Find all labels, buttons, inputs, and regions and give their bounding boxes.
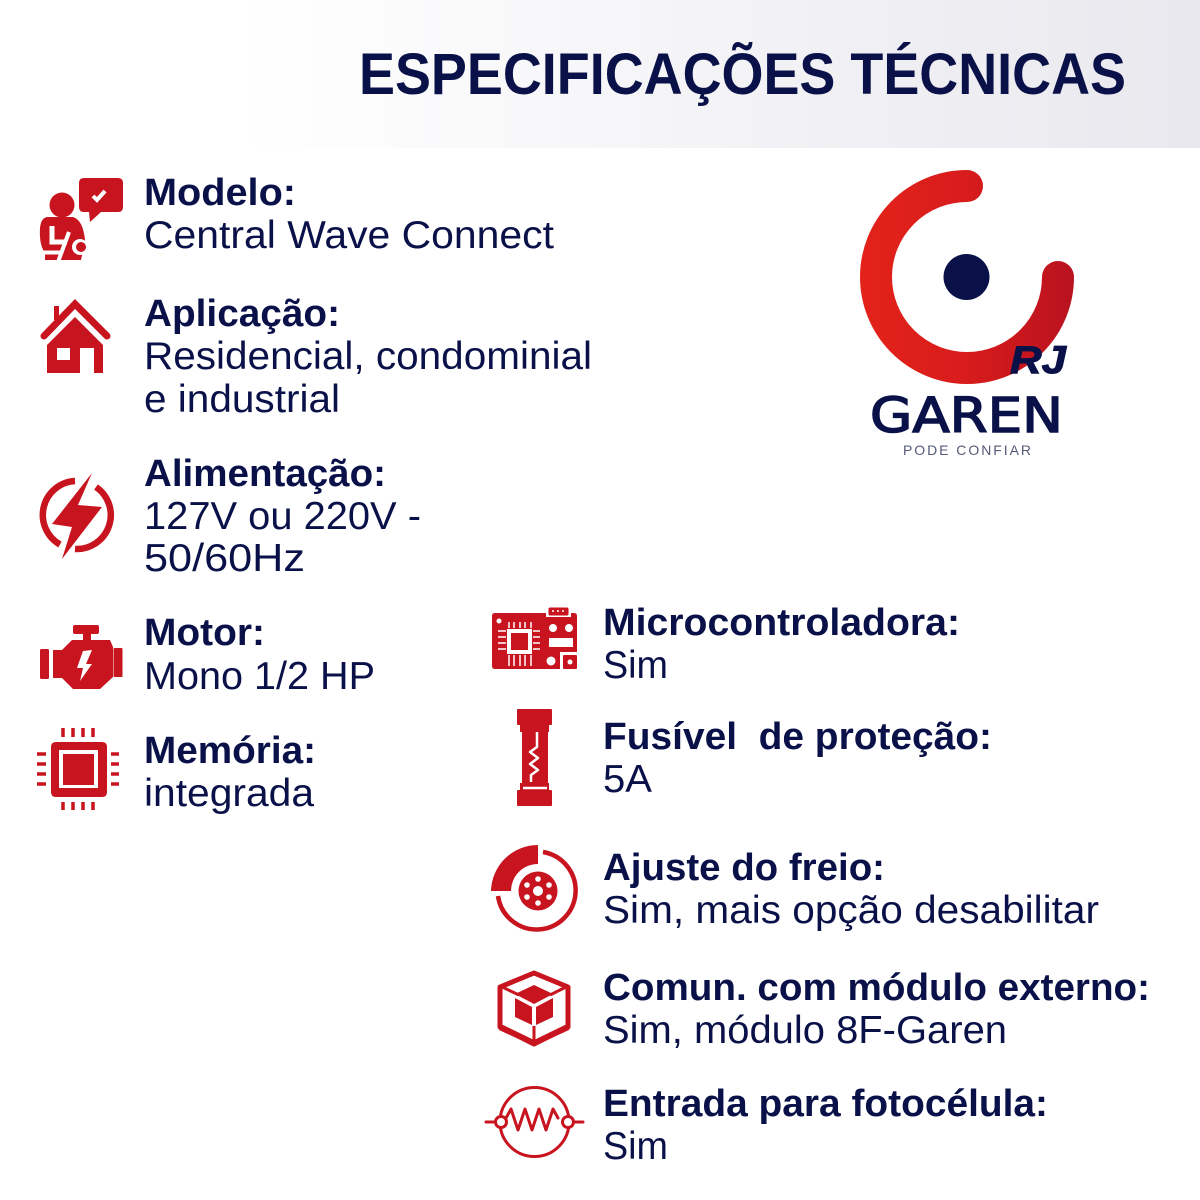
text: motor [144,612,375,698]
logo wordmark: GAREN [870,388,1063,444]
text: memoria: integrada [144,772,314,815]
icon: photocell [486,1088,583,1156]
text: aplicacao: Aplicação: [144,293,340,335]
text: memoria: Memória: [144,730,316,772]
text: comunicacao: Comun. com módulo externo: [603,967,1150,1009]
text: ajuste do freio: Sim, mais opção desabilitar [603,889,1099,932]
text: alimentacao [144,453,421,580]
text: fusivel: 5A [603,758,652,801]
icon: circuit board [492,607,577,669]
logo: Garen RJ [870,186,1067,458]
text: aplicacao [144,293,592,421]
header band [0,0,1200,148]
text: motor: Mono 1/2 HP [144,655,375,698]
text: microcontroladora: Microcontroladora: [603,602,960,644]
icon: engine [40,625,122,689]
text: fusivel: Fusível de proteção: [603,716,992,758]
title: ESPECIFICAÇÕES TÉCNICAS [359,42,1126,107]
icon: fuse [517,709,552,806]
logo dot [944,254,990,300]
icon: house [44,304,107,373]
text: fusivel [603,716,992,801]
icon: cube module [499,973,569,1046]
text: fotocelula: Entrada para fotocélula: [603,1083,1048,1125]
text: comunicacao [603,967,1150,1052]
text: alimentacao: 50/60Hz [144,537,305,580]
text: motor: Motor: [144,612,265,654]
text: comunicacao: Sim, módulo 8F-Garen [603,1009,1007,1052]
text: ajuste do freio: Ajuste do freio: [603,847,885,889]
icon: person with speech bubble [40,178,123,262]
text: fotocelula: Sim [603,1125,668,1168]
text: modelo [144,172,554,257]
text: microcontroladora: Sim [603,644,668,687]
text: alimentacao: 127V ou 220V - [144,495,421,538]
text: microcontroladora [603,602,960,687]
text: memoria [144,730,316,815]
text: modelo: Modelo: [144,172,296,214]
logo ring [876,186,1058,368]
text: fotocelula [603,1083,1048,1168]
logo tagline: PODE CONFIAR [903,442,1031,458]
text: aplicacao: Residencial, condominial [144,335,592,378]
icon: brake disc [491,845,576,929]
icon: lightning in circle [43,473,111,559]
text: aplicacao: e industrial [144,378,340,421]
icon: memory chip [37,728,119,810]
text: modelo: Central Wave Connect [144,214,554,257]
logo RJ: RJ [1010,339,1067,382]
text: alimentacao: Alimentação: [144,453,386,495]
text: ajuste do freio [603,847,1099,932]
